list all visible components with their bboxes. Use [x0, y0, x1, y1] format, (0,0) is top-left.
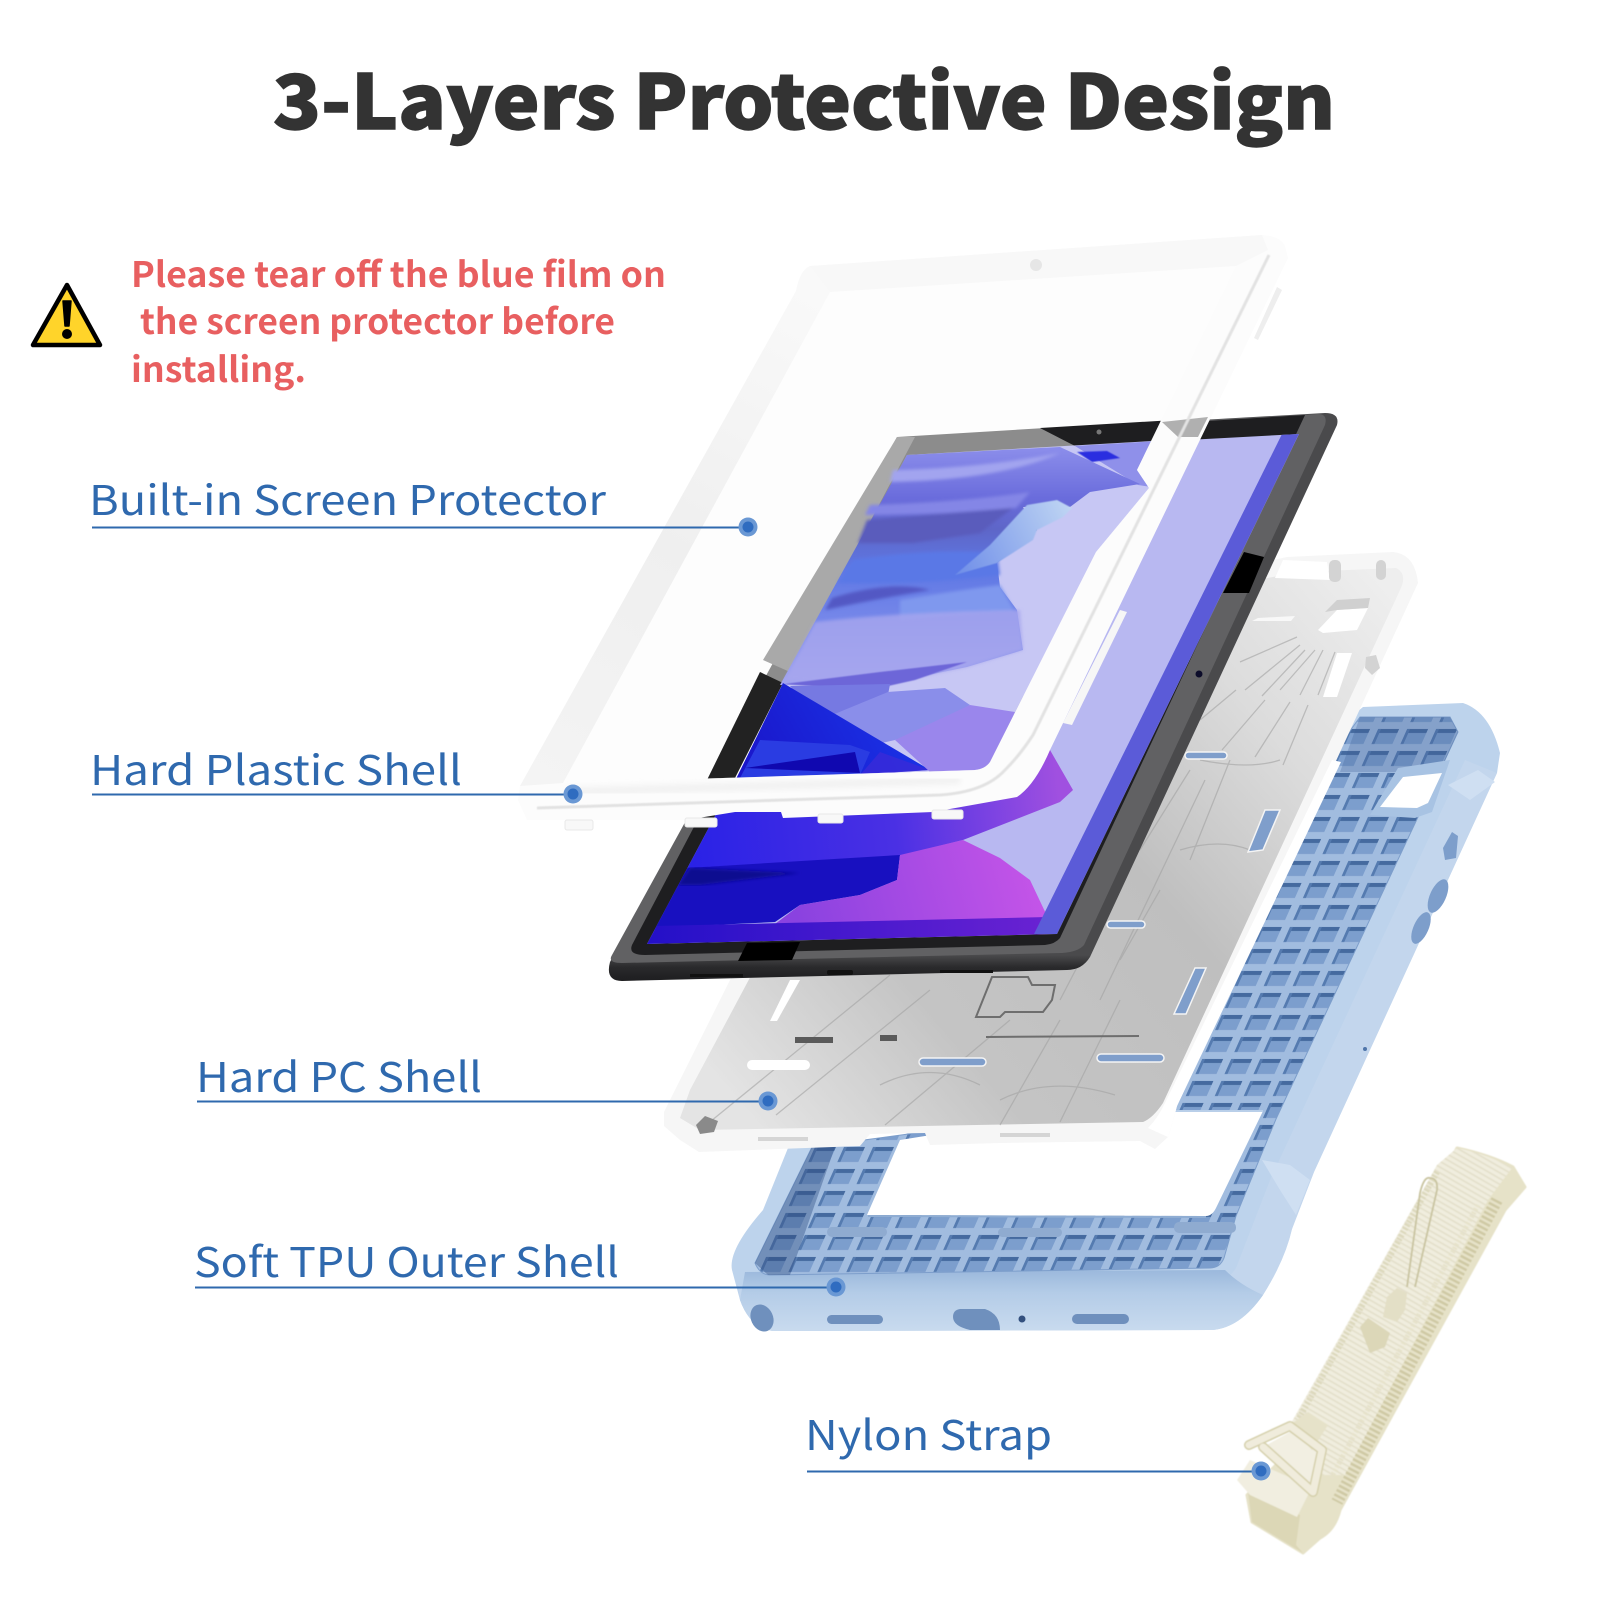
frame edge ledge [1063, 610, 1127, 725]
icon: warning triangle [33, 285, 100, 345]
label: built-in screen protector: Built-in Screen Protector [89, 467, 606, 527]
warning note text [131, 247, 666, 393]
side buttons [1407, 832, 1458, 947]
layer: screen protector frame [518, 235, 1288, 830]
frame body [518, 235, 1288, 820]
layer: nylon strap [1237, 1148, 1525, 1553]
PC shell blue slots [919, 752, 1280, 1066]
glass view: tablet bezel grey [706, 428, 1090, 785]
label: hard plastic shell [90, 737, 582, 804]
layer: soft TPU outer shell [732, 703, 1500, 1335]
bottom port holes [746, 1301, 1129, 1335]
label: hard PC shell [196, 1044, 778, 1110]
strap stitched edges [1337, 1200, 1497, 1502]
strap woven face [1290, 1148, 1512, 1475]
warning note text: the screen protector before [140, 294, 615, 345]
label: soft TPU outer shell: Soft TPU Outer Shell [194, 1229, 619, 1289]
centre cut-out [867, 1100, 1263, 1216]
web relief lines [700, 637, 1335, 1130]
strap back layer [1247, 1148, 1525, 1553]
glass window view of tablet [708, 420, 1161, 778]
wallpaper bottom strip [647, 917, 1057, 944]
camera and ports [1196, 670, 1202, 678]
glass view: wave streaks [785, 453, 1060, 685]
wallpaper right band [1034, 434, 1299, 934]
strap triangular ring [1249, 1426, 1322, 1492]
label: built-in screen protector [89, 467, 758, 536]
strap ring infill [1263, 1432, 1318, 1485]
wallpaper dark band [650, 855, 900, 928]
glass view: black bezel [1040, 420, 1161, 446]
wallpaper pink area [775, 840, 1048, 924]
title: 3-Layers Protective Design [273, 42, 1335, 151]
bezel black blocks [738, 552, 1264, 961]
frame fold shadow [537, 255, 1269, 808]
glass view: light crest [955, 500, 1072, 575]
PC shell openings [747, 560, 1368, 1070]
label: nylon strap [805, 1402, 1270, 1480]
strap buckle [1383, 1288, 1407, 1322]
warning note text: Please tear off the blue film on [131, 247, 666, 298]
glass view: saturated lower blue [735, 683, 930, 781]
warning note text: installing. [131, 342, 306, 393]
glass view: wallpaper [786, 441, 1151, 773]
waffle grip pattern [755, 717, 1458, 1275]
strap hanging loop [1407, 1178, 1437, 1287]
glass view: purple wash [895, 705, 1015, 772]
camera cut-out [1370, 760, 1450, 818]
label: nylon strap: Nylon Strap [805, 1402, 1052, 1462]
label: hard PC shell: Hard PC Shell [196, 1044, 482, 1104]
frame cross tablet shade [1162, 417, 1208, 437]
tablet body [609, 413, 1338, 981]
frame left band [520, 266, 830, 786]
corner bosses [1329, 560, 1386, 675]
rim bevel [1262, 770, 1495, 1215]
small fittings [795, 1037, 833, 1043]
black bezel [631, 415, 1305, 955]
SD slot outline [976, 977, 1055, 1017]
label: soft TPU outer shell [194, 1229, 846, 1296]
label: hard plastic shell: Hard Plastic Shell [90, 737, 462, 797]
layer: hard PC shell [664, 552, 1418, 1152]
raised ribs [827, 1222, 1236, 1237]
frame tabs [565, 810, 963, 830]
frame top band [810, 235, 1268, 292]
strap lower fold [1248, 1492, 1303, 1553]
layer: tablet [609, 413, 1338, 981]
screen wallpaper [640, 420, 1310, 950]
strap keeper [1290, 1412, 1328, 1450]
wallpaper lower blue [640, 750, 1073, 930]
